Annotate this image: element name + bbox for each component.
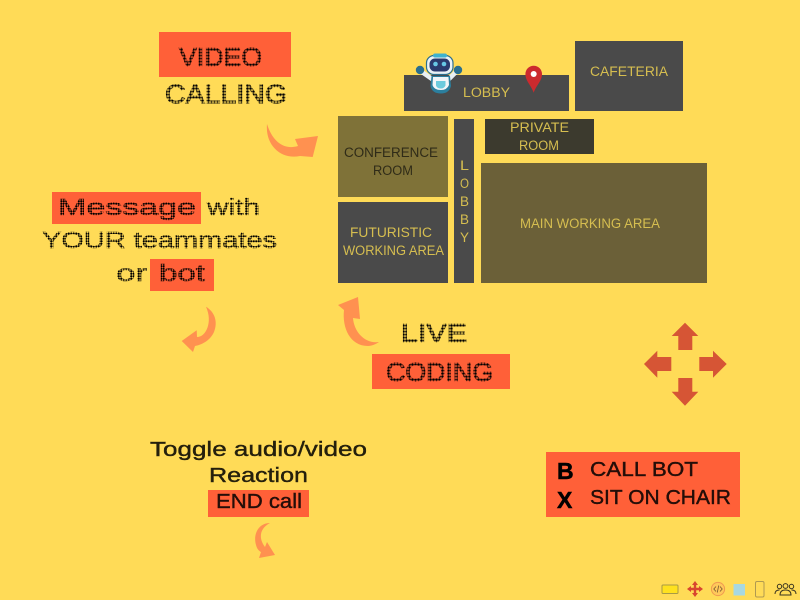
- room: top lobby: [404, 75, 569, 111]
- room: private room: [485, 119, 594, 154]
- icon: chat: [662, 585, 678, 594]
- text block: call controls: Reaction: [209, 465, 308, 487]
- panel: key bindings: [546, 452, 740, 517]
- text block: message teammates or bot: with: [206, 194, 260, 220]
- icon: movement arrow keys: [644, 323, 727, 406]
- heading: live coding: LIVE: [401, 318, 467, 348]
- room: cafeteria: [575, 41, 683, 111]
- text block: message teammates or bot: YOUR teammates: [42, 227, 277, 253]
- room: futuristic working area: FUTURISTIC: [350, 225, 432, 240]
- icon: note: [734, 584, 745, 596]
- room: vertical lobby: B: [460, 212, 469, 227]
- icon: people: [775, 584, 796, 595]
- heading: video calling: VIDEO: [179, 42, 262, 72]
- text block: call controls: Toggle audio/video: [150, 439, 367, 461]
- text block: call controls: [150, 439, 367, 517]
- text block: message teammates or bot: bot: [159, 260, 206, 286]
- room: private room: ROOM: [519, 138, 559, 153]
- room: main working area: [481, 163, 707, 283]
- heading: live coding: CODING: [386, 357, 493, 387]
- room: futuristic working area: [338, 202, 448, 283]
- icon: code: [711, 582, 725, 596]
- panel: key bindings: CALL BOT: [590, 459, 698, 481]
- room: conference room: [338, 116, 448, 197]
- arrow: video calling to map: [267, 124, 318, 157]
- room: main working area: MAIN WORKING AREA: [520, 216, 660, 231]
- room: vertical lobby: O: [460, 176, 469, 191]
- room: conference room: CONFERENCE: [344, 145, 438, 160]
- text block: message teammates or bot: or: [116, 260, 148, 286]
- text block: message teammates or bot: [42, 192, 277, 291]
- arrow: live coding to map: [338, 297, 379, 346]
- floor plan: [338, 41, 707, 283]
- room: vertical lobby: L: [460, 158, 470, 173]
- robot head: [426, 56, 453, 74]
- arrow: call controls downward: [255, 523, 275, 558]
- panel: key bindings: B: [557, 458, 574, 484]
- heading: video calling: CALLING: [165, 79, 287, 109]
- room: futuristic working area: WORKING AREA: [343, 243, 444, 258]
- panel: key bindings: SIT ON CHAIR: [590, 487, 731, 509]
- room: top lobby: LOBBY: [463, 85, 510, 100]
- arrow: message to controls: [182, 307, 216, 352]
- robot body: [430, 76, 451, 94]
- room: vertical lobby: B: [460, 194, 469, 209]
- text block: call controls: END call: [216, 491, 302, 513]
- icon: phone: [756, 582, 764, 597]
- room: cafeteria: CAFETERIA: [590, 64, 668, 79]
- icon: location pin: [525, 66, 542, 93]
- heading: video calling: [159, 32, 291, 109]
- text block: message teammates or bot: Message: [58, 194, 196, 220]
- toolbar icons: [662, 581, 796, 597]
- room: conference room: ROOM: [373, 163, 413, 178]
- room: vertical lobby: [454, 119, 474, 283]
- heading: live coding: [372, 318, 510, 389]
- icon: robot: [416, 54, 462, 94]
- icon: move: [687, 581, 703, 597]
- robot arms and hands: [422, 72, 456, 79]
- room: vertical lobby: Y: [460, 230, 469, 245]
- room: private room: PRIVATE: [510, 120, 569, 135]
- panel: key bindings: X: [557, 487, 573, 513]
